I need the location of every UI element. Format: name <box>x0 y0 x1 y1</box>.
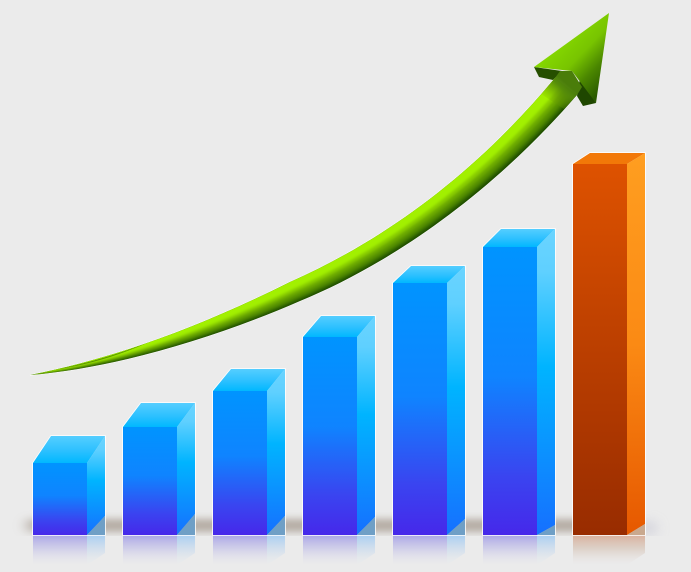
arrow shaft end cap <box>541 71 582 109</box>
green growth arrow <box>20 13 609 390</box>
bar 7: orange highlight bar <box>573 153 645 535</box>
bar 6 <box>483 229 555 535</box>
bar 4 <box>303 316 375 535</box>
bar 3 <box>213 369 285 535</box>
dark sliver on tail top edge <box>56 343 147 370</box>
arrow shaft <box>30 78 577 375</box>
bar 1 <box>33 436 105 535</box>
bar 2 <box>123 403 195 535</box>
bar reflections <box>33 535 645 565</box>
bar 5 <box>393 266 465 535</box>
ground shadow <box>28 519 658 534</box>
arrow head <box>534 13 609 106</box>
